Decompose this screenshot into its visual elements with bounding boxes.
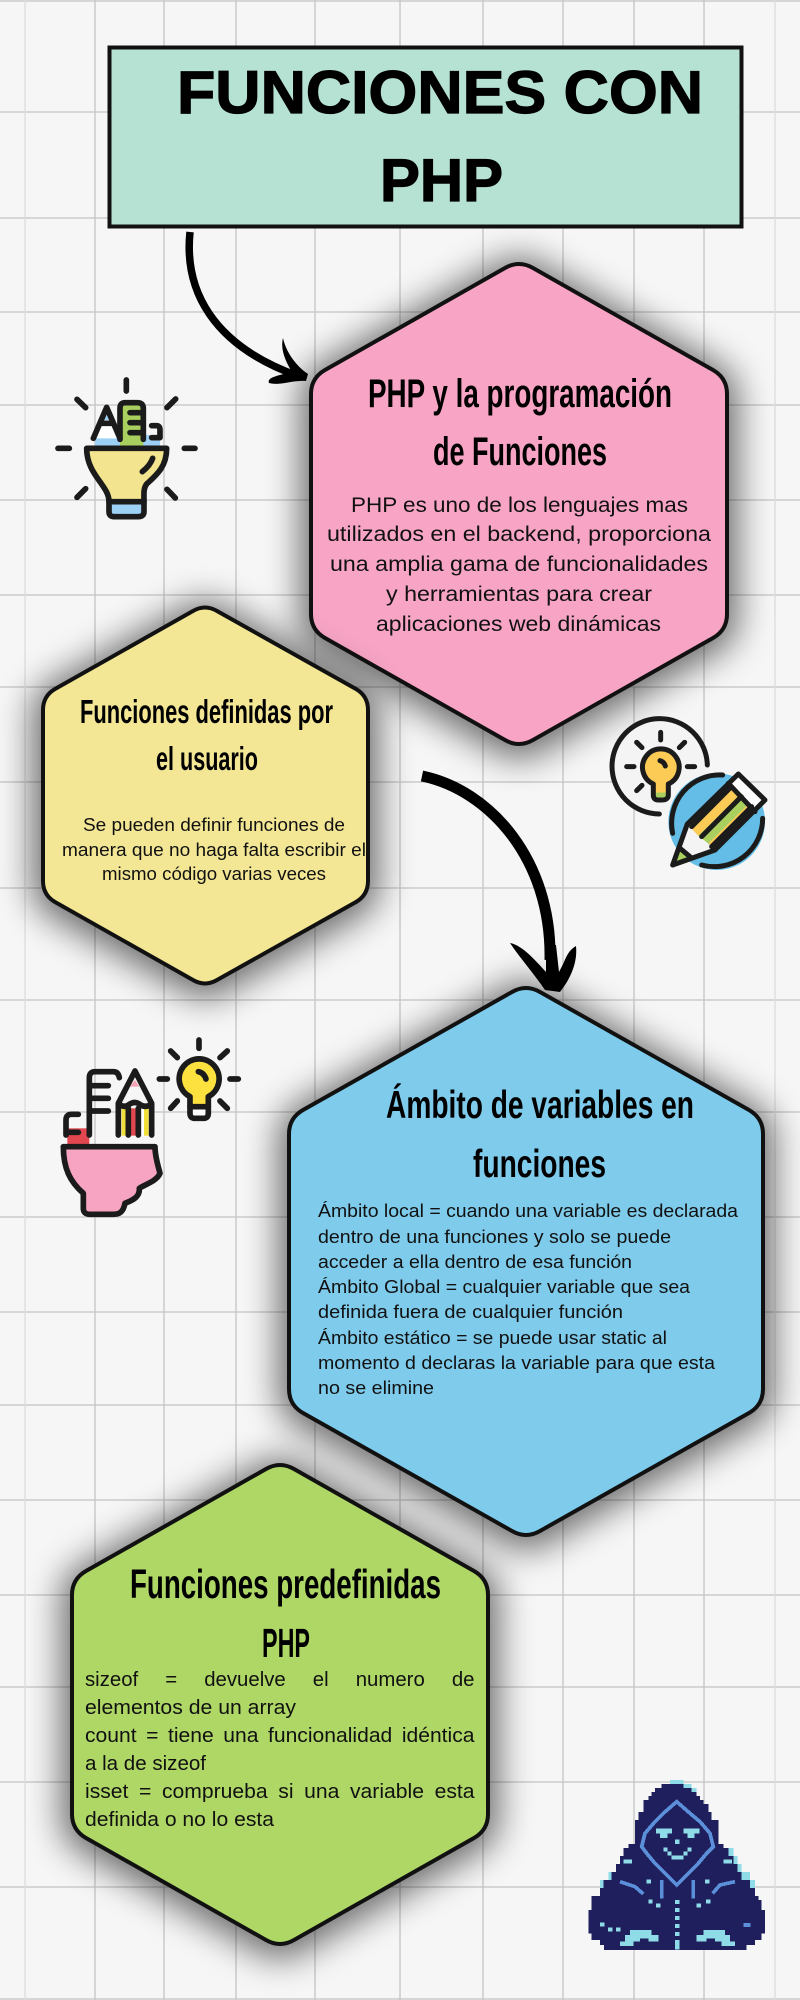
text block: descripción funciones de usuario: Se pueden definir funciones de [83, 815, 345, 835]
icon: pixel art hacker [588, 1780, 765, 1950]
panel: Funciones definidas por el usuario [43, 608, 368, 988]
icon: lightbulb and pencil [612, 719, 765, 870]
panel: PHP y la programación de Funciones [311, 264, 727, 748]
heading: PHP y la programación [368, 372, 672, 474]
heading: Funciones predefinidas PHP: PHP [262, 1620, 310, 1666]
text block: tipos de ámbito: definida fuera de cualquier función [318, 1301, 623, 1322]
title [110, 48, 742, 226]
text block: tipos de ámbito: Ámbito Global = cualquier variable que sea [318, 1276, 691, 1297]
text block: descripción PHP: utilizados en el backend, proporciona [327, 523, 711, 546]
text block: descripción PHP: aplicaciones web dinámicas [376, 613, 661, 636]
panel: Ámbito de variables en funciones [289, 988, 763, 1539]
heading: Funciones definidas por el usuario: el usuario [156, 740, 258, 777]
text block: tipos de ámbito [318, 1200, 739, 1398]
arrow: yellow hexagon to blue hexagon [422, 776, 576, 992]
text block: funciones predefinidas: definida o no lo esta [85, 1809, 275, 1831]
text block: descripción PHP: una amplia gama de funcionalidades [330, 553, 708, 576]
heading: Ámbito de variables en funciones: funciones [473, 1143, 606, 1186]
text block: descripción PHP: y herramientas para crear [386, 583, 652, 606]
heading: PHP y la programación: PHP y la programación [368, 372, 672, 416]
text block: descripción funciones de usuario [62, 815, 366, 884]
text block: descripción PHP [327, 494, 711, 636]
heading: Funciones predefinidas PHP [130, 1561, 441, 1666]
text block: tipos de ámbito: no se elimine [318, 1377, 434, 1398]
text block: tipos de ámbito: Ámbito estático = se puede usar static al [318, 1327, 667, 1348]
heading: Funciones definidas por el usuario: Funciones definidas por [80, 693, 333, 730]
text block: funciones predefinidas [85, 1669, 475, 1831]
text block: descripción PHP: PHP es uno de los lenguajes mas [351, 494, 688, 517]
text block: funciones predefinidas: a la de sizeof [85, 1753, 206, 1775]
heading: Funciones predefinidas PHP: Funciones predefinidas [130, 1561, 441, 1607]
text block: funciones predefinidas: elementos de un array [85, 1697, 296, 1719]
icon: head with ruler, pencil and lightbulb [63, 1040, 238, 1214]
heading: Funciones definidas por el usuario [80, 693, 333, 777]
panel: Funciones predefinidas PHP [72, 1465, 488, 1948]
text block: funciones predefinidas: sizeof = devuelve el numero de [85, 1669, 474, 1691]
icon: bulb with pencil and ruler [58, 380, 195, 517]
heading: PHP y la programación: de Funciones [433, 430, 607, 474]
text block: tipos de ámbito: Ámbito local = cuando una variable es declarada [318, 1200, 739, 1221]
title: PHP [380, 147, 503, 214]
text block: tipos de ámbito: acceder a ella dentro de esa función [318, 1251, 632, 1272]
arrow: title to pink hexagon [189, 232, 308, 384]
text block: tipos de ámbito: dentro de una funciones y solo se puede [318, 1226, 671, 1247]
text block: funciones predefinidas: count = tiene una funcionalidad idéntica [85, 1725, 475, 1747]
text block: descripción funciones de usuario: mismo código varias veces [102, 864, 326, 884]
heading: Ámbito de variables en funciones [386, 1083, 694, 1186]
text block: descripción funciones de usuario: manera que no haga falta escribir el [62, 840, 366, 860]
text block: tipos de ámbito: momento d declaras la variable para que esta [318, 1352, 716, 1373]
text block: funciones predefinidas: isset = comprueba si una variable esta [85, 1781, 475, 1803]
title: FUNCIONES CON [177, 59, 703, 126]
